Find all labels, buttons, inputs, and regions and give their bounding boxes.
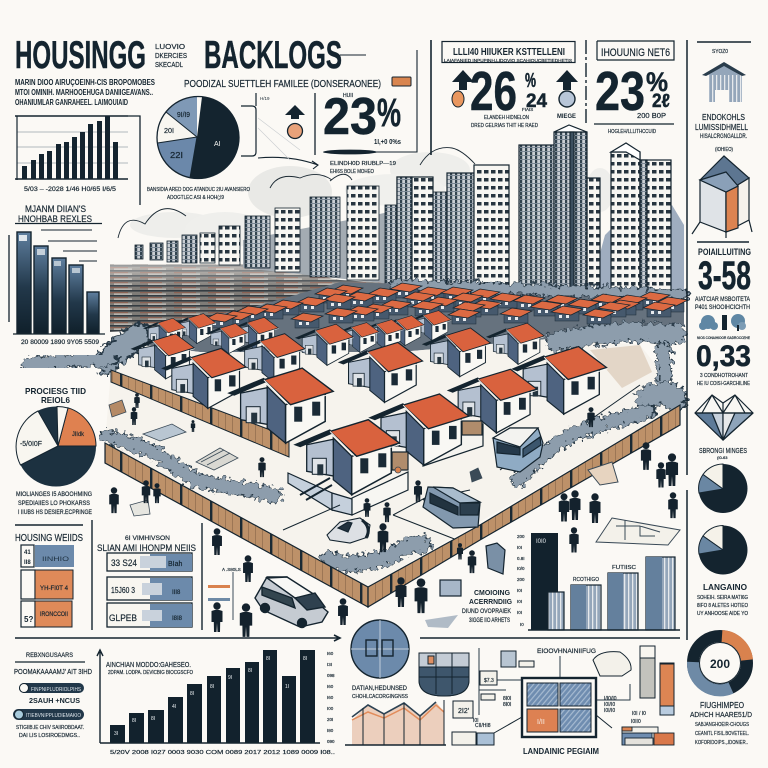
right text: endorsements: LUMISSIDHMELL (695, 123, 748, 132)
bar chart: scale columns: 0.8I (517, 556, 525, 561)
van (255, 577, 328, 628)
heading: process records (25, 386, 86, 405)
bar chart: scale columns: 200 (517, 577, 525, 582)
panel: beneficiaries legend (13, 652, 92, 739)
pie chart: lower (698, 526, 748, 574)
bar chart: annual progress: 20I (327, 717, 333, 722)
diagram labels: 2I2' (458, 708, 469, 715)
bar chart: scale columns: I0/0 (517, 566, 525, 571)
intro text block: MTOI OMINIH. MARHOOEHUGA DANIIGEAVANS.. (15, 88, 153, 97)
right text: funding: ADHCH HAARE51/D (690, 710, 753, 719)
tower A (519, 125, 587, 292)
panel: population statistic: P401 SHOOIHCICHTH (695, 305, 750, 311)
bar chart: annual progress: 8I (210, 684, 214, 690)
distant field stripes (110, 264, 420, 332)
bar chart: annual progress: 8I (266, 656, 270, 662)
panel: middle income statistic 26: LLLI40 HIIUKER KSTTELLENI (453, 47, 565, 58)
divider left with arrow (15, 635, 340, 641)
statistic: 23 percent: HUII (343, 93, 353, 99)
tower skyline (135, 125, 671, 293)
panel: slum and income needs: SLIAN AMI IHONPM NEIIS (97, 543, 196, 554)
landing program diagram: LANDAINIC PEGIAIM (523, 747, 599, 756)
right text: landing: SOHEIH. SEIRA MATI6G (697, 595, 748, 601)
panel: middle income statistic 26: 24 (526, 91, 547, 112)
pie chart: process records (16, 406, 96, 486)
panel: slum and income needs (97, 523, 241, 630)
diagram labels: I0II0 (631, 719, 641, 725)
site plan sketch (588, 462, 680, 545)
caption: data housing (352, 686, 408, 700)
sky, clouds and mountains (118, 148, 684, 320)
line area chart (345, 700, 446, 745)
bar chart: annual progress: 8I (248, 668, 252, 674)
right text: landing (697, 583, 749, 617)
bar chart: scale columns (517, 533, 680, 630)
car (327, 518, 370, 543)
panel: housing needs table: YH-FI0T 4 (40, 586, 69, 592)
diagram labels: I0I/I0 (604, 708, 615, 714)
pie chart: strong ranges: (I0-63 (717, 455, 728, 460)
bar chart: annual progress: I60 (327, 695, 334, 700)
bare lot top right (590, 345, 652, 388)
right text: endorsements (695, 113, 748, 153)
diagram labels: 8I0I (503, 702, 511, 708)
bar chart: backlog growth: 5/03 – -2028 1/46 H0/65 I/6/5 (24, 186, 116, 193)
panel: slum and income needs: 15J60 3 (111, 586, 135, 595)
bar chart: scale columns: I0I0 (536, 539, 547, 545)
heading: process records: REIOL6 (41, 395, 70, 405)
bar chart: annual progress: I60 (327, 651, 334, 656)
statistic: 0,33 (696, 336, 751, 387)
bar chart: annual progress: 8I (190, 691, 194, 697)
distant towers (135, 186, 447, 287)
stacked cards (622, 727, 674, 745)
bar chart: households: 20 80009 1890 9Y05 5509 (21, 340, 100, 346)
panel: choosing markets text (462, 588, 512, 624)
right text: funding: FIUGHIMPEO (700, 701, 744, 710)
right text: landing: LANGAINO (703, 583, 747, 592)
left heading: main households: MJANM DIIAN'S (25, 204, 86, 214)
bar chart: annual progress: 3I (114, 731, 118, 737)
circle icon: window (351, 620, 409, 678)
donut chart: 200 (710, 657, 730, 671)
intro text block: OHANIUMLAR GANRAHEEL. LAIMOUIAID (15, 98, 128, 107)
panel: housing needs table: IINHIO (42, 557, 69, 563)
pie caption: process records: I IIUBS HS DESIER.ECPRINGE (18, 510, 92, 516)
diagram labels (458, 678, 646, 729)
panel: choosing markets text: ACERRNDIIG (469, 597, 512, 606)
tower C (447, 165, 509, 288)
building table icon (419, 653, 469, 696)
panel: choosing markets text: 3IGGE IIO ARHETS (469, 618, 510, 624)
title: housing backlogs: HOUSINGG (15, 34, 146, 77)
panel: beneficiaries legend: DAI LIS LOSIROEDMGS.. (19, 733, 80, 739)
panel: middle income statistic 26: MIEGE (557, 114, 576, 120)
panel: housing needs statistic 23: % (646, 67, 668, 97)
panel: housing needs statistic 23: 2ℓ (652, 91, 670, 112)
fence: lower left (105, 443, 368, 607)
bar chart: annual progress: 9I (228, 675, 232, 681)
statistic: 23 percent (315, 50, 417, 175)
bus: center (423, 487, 480, 528)
panel: population statistic: POIAILLUITING (698, 247, 751, 257)
bar chart: annual progress: AINCHIAN MODDO:GAHESEO. (106, 662, 191, 669)
pie caption: process records: MIOLIANGES I5 ABOOHMING (16, 492, 92, 498)
landing program diagram (479, 648, 630, 756)
pie chart: strong ranges: SBRONGI MINGES (699, 446, 747, 455)
panel: beneficiaries legend: ITIEBVNIPPLUDIEMAKIO (26, 713, 81, 719)
donut chart (693, 636, 747, 690)
hedges along lower fences (106, 412, 650, 564)
bar chart: annual progress: 090 (327, 739, 335, 744)
right text: landing: UY ANHOOSE AIDE YO (697, 611, 749, 617)
bar chart: scale columns: RCOTHIGO (573, 577, 600, 583)
panel: housing needs table: IRONCCOII (40, 612, 68, 618)
pie chart: settlement families: 22I (170, 151, 183, 160)
panel: housing needs statistic 23: HOGLEH/LLLITHCCUID (608, 129, 656, 135)
panel: housing needs statistic 23: 23 (595, 60, 645, 122)
panel: choosing markets text: CMOIOING (474, 588, 510, 597)
pie chart: strong ranges (698, 446, 748, 513)
panel: slum and income needs: A .S80LS (222, 567, 241, 572)
panel: slum and income needs: 33 S24 (111, 558, 137, 568)
bar chart: scale columns: I0I (517, 599, 522, 604)
title: housing backlogs: BACKLOGS (204, 34, 342, 77)
statistic: 23 percent: EHI6S BOLE MOHEO (330, 169, 375, 175)
right text: funding: KOFORIDOIPS.,.IDONIER.. (695, 740, 748, 746)
panel: slum and income needs: BIah (168, 561, 183, 568)
bar chart: scale columns: 200 (517, 534, 525, 539)
bar chart: annual progress: 2DPAM. LODPA. DEVICBIG BIOCGSCFO (108, 670, 193, 676)
title: housing backlogs (15, 34, 366, 77)
bar chart: scale columns: I0I (517, 545, 522, 550)
panel: beneficiaries legend: FINPNIPLUDRIOLPIHS (31, 687, 82, 693)
statistic: 23 percent: 23 (323, 88, 377, 146)
diagram labels: I0I (473, 718, 479, 724)
panel: population statistic: AIATCIAR MSBOITETA (695, 297, 750, 303)
panel: choosing markets text: DIUND OVOPRAIEK (462, 609, 511, 615)
bar chart: annual progress: 4I (172, 704, 176, 710)
diagram labels: CII/HI8 (475, 723, 491, 729)
bracket callout (241, 93, 300, 160)
bar chart: households (9, 230, 105, 346)
tower B (611, 143, 671, 290)
bar chart: annual progress: 8I (303, 656, 307, 662)
bar chart: scale columns: I0I (517, 610, 522, 615)
panel: middle income statistic 26: LAIAFANIED INPUPINH.LIDOVIO SCAHIOUCBETIEDHETIS (444, 58, 572, 63)
shrubs under left chart (30, 358, 112, 365)
pie chart: process records: JIIdk (72, 432, 85, 438)
panel: housing needs statistic 23: IHOUUNIG NET6 (601, 47, 670, 59)
pie chart: settlement families: 20I (164, 128, 174, 135)
bracket callout: H/19 (260, 96, 270, 101)
bar chart: scale columns: FUTIISC (612, 565, 636, 571)
panel: middle income statistic 26: ELANDEH HIDNELON (484, 115, 529, 121)
tower small (587, 178, 600, 293)
panel: slum and income needs: GLPEB (109, 613, 137, 624)
icon: building block (692, 156, 752, 238)
statistic: 0,33: 0,33 (696, 340, 751, 373)
pie chart: settlement families: AI (214, 141, 221, 148)
bus: right (493, 428, 543, 472)
diagram labels: I/I0/I0 (604, 696, 617, 702)
panel: middle income statistic 26: FIAIS (522, 107, 533, 112)
panel: beneficiaries legend: REBXNGUSAARS (26, 652, 74, 659)
statistic: 0,33: NIOS CONAIHIOOR GADROCCEHE (697, 336, 751, 340)
panel: slum and income needs: I8I8 (172, 616, 183, 622)
divider right (420, 637, 680, 639)
panel: housing needs statistic 23: 200 B0P (637, 113, 666, 120)
panel: beneficiaries legend: STIGIIB.IE CHIV SAIIROBDAAT. (16, 725, 84, 731)
icon: arrow and orange circle (285, 105, 305, 138)
left heading: main households (15, 204, 102, 225)
title: housing backlogs: SKECADL (155, 62, 183, 69)
right column header and house icon (697, 42, 751, 102)
right text: funding: CEANITL FISIL.BOVETEEL. (695, 731, 749, 737)
fence: inner upper left (111, 370, 289, 457)
statistic: 23 percent: ELINDH0D RIUBLP—19 (330, 161, 396, 167)
pie chart: process records: -5/0I0F (20, 441, 42, 448)
icons: signs (425, 543, 505, 628)
panel: population statistic (695, 242, 751, 311)
tower D (397, 177, 433, 285)
hedges behind the village (108, 285, 684, 400)
bar chart: annual progress: 8I (151, 716, 155, 722)
right text: funding (690, 701, 753, 746)
panel: middle income statistic 26: % (525, 70, 536, 92)
pie caption: BANSIDIA ARED DOG ATANDUC 2IU AVANSIERO (147, 187, 251, 193)
diagram labels: $7.3 (484, 678, 494, 684)
bar chart: annual progress: I60 (327, 684, 334, 689)
bar chart: scale columns: I0 (520, 622, 524, 627)
heading: social settlement families: POODIZAL SUETTLEH FAMILEE (DONSERAONEE) (184, 79, 381, 90)
bar chart: scale columns: I0I (517, 588, 522, 593)
bar chart: backlog growth (15, 116, 140, 205)
courtyard debris and stairs (109, 400, 482, 516)
house 1 base walls and stairs (288, 452, 408, 515)
pie caption: process records: SPEDIAIIES LO PHOKARSS (18, 501, 90, 507)
panel: housing needs table: HOUSING WEIIDS (15, 533, 83, 544)
panel: middle income statistic 26 (431, 40, 578, 155)
landing program diagram: I/II (537, 719, 545, 726)
heading: process records: PROCIESG TIID (25, 386, 86, 396)
panel: housing needs table: 5? (24, 615, 33, 624)
panel: housing needs table (15, 520, 92, 630)
intro text block (15, 78, 156, 107)
panel: slum and income needs: III8 (172, 590, 181, 596)
title: housing backlogs: LUOVIO (155, 44, 186, 51)
people silhouettes (109, 393, 678, 637)
title: housing backlogs: DKERCIES (155, 53, 187, 60)
fence: lower right (368, 405, 680, 607)
panel: slum and income needs: 6I VIMHIVSON (125, 535, 170, 542)
panel: housing needs table: II8 (24, 560, 31, 566)
pie caption (147, 187, 251, 201)
landing program diagram: EIOOVHNAINIIFUG (537, 648, 596, 655)
right text: endorsements: ENDOKOHLS (702, 113, 745, 122)
right text: endorsements: HISALCRGNGALLDR. (700, 134, 747, 140)
statistic: 23 percent: 1I,+0 0%s (374, 139, 401, 146)
caption: data housing: DATIAN,HEDUNSED (352, 686, 408, 692)
small diagram nodes (452, 651, 631, 745)
icon: trees (699, 314, 746, 331)
panel: middle income statistic 26: 26 (470, 60, 517, 122)
pie chart: settlement families: 9I/I9 (177, 112, 190, 119)
left heading: main households: HNOHBAB REXLES (18, 214, 92, 225)
statistic: 0,33: 3 CONDHOTROHANT (700, 373, 749, 379)
panel: housing needs statistic 23 (586, 40, 674, 135)
distant rooftops (205, 283, 688, 328)
backing haze between distant towers (243, 210, 400, 285)
bar chart: annual progress: I3I (327, 662, 332, 667)
village ground (105, 338, 680, 587)
right text: funding: SABJANGHOEIR-CHOUGS (695, 722, 749, 728)
diagram labels: I0I / I0 (632, 711, 646, 717)
houses, back to front (131, 311, 607, 515)
bar chart: annual progress: 1I (285, 684, 289, 690)
courtyard path lines (283, 385, 640, 540)
diagram labels: I0I/I0 (604, 702, 615, 708)
pie caption: ADOGTLEC ASI & HOH(;I9 (167, 195, 224, 201)
icon: diamond (695, 395, 753, 440)
statistic: 0,33: HE IU COISI-GARCHILINE (697, 381, 750, 387)
bar chart: annual progress: I80 (327, 728, 334, 733)
statistic: 23 percent: % (377, 91, 401, 135)
panel: middle income statistic 26: DRED GELRIAS THIT HE RAED (471, 123, 538, 129)
panel: beneficiaries legend: 2SAUH +NCUS (29, 696, 80, 705)
house 2 base wall (423, 421, 483, 466)
bar chart: annual progress: 098 (327, 673, 335, 678)
right divider (686, 40, 688, 640)
stacked gauge columns (640, 646, 674, 715)
dense rooftop zone backdrop (143, 282, 684, 352)
right text: endorsements: (IOHIEO) (715, 147, 733, 153)
pie chart: settlement families (157, 96, 239, 179)
bar chart: annual progress (97, 650, 336, 756)
caption: data housing: CHOHLCACORGINGNSS (352, 694, 408, 700)
panel: beneficiaries legend: POOMAKAAAAMJ' AIT 3IHD (14, 669, 92, 676)
right text: landing: 8IFO 8 ALETES HOTIEO (697, 603, 749, 609)
bar chart: annual progress: 5/20V 2008 I027 0003 9030 COM 0089 2017 2012 1089 0009 I08.. (110, 750, 336, 756)
panel: housing needs table: 41 (24, 550, 31, 556)
diagram labels: 8I0I (503, 696, 511, 702)
pie caption: process records (16, 492, 92, 516)
intro text block: MARIN DIOO AIRUÇOEINH-CIS BROPOMOBES (15, 78, 156, 87)
right column header and house icon: SYOZ0 (712, 49, 728, 55)
bar chart: annual progress: I00 (327, 706, 334, 711)
bar chart: annual progress: 8I (132, 718, 136, 724)
